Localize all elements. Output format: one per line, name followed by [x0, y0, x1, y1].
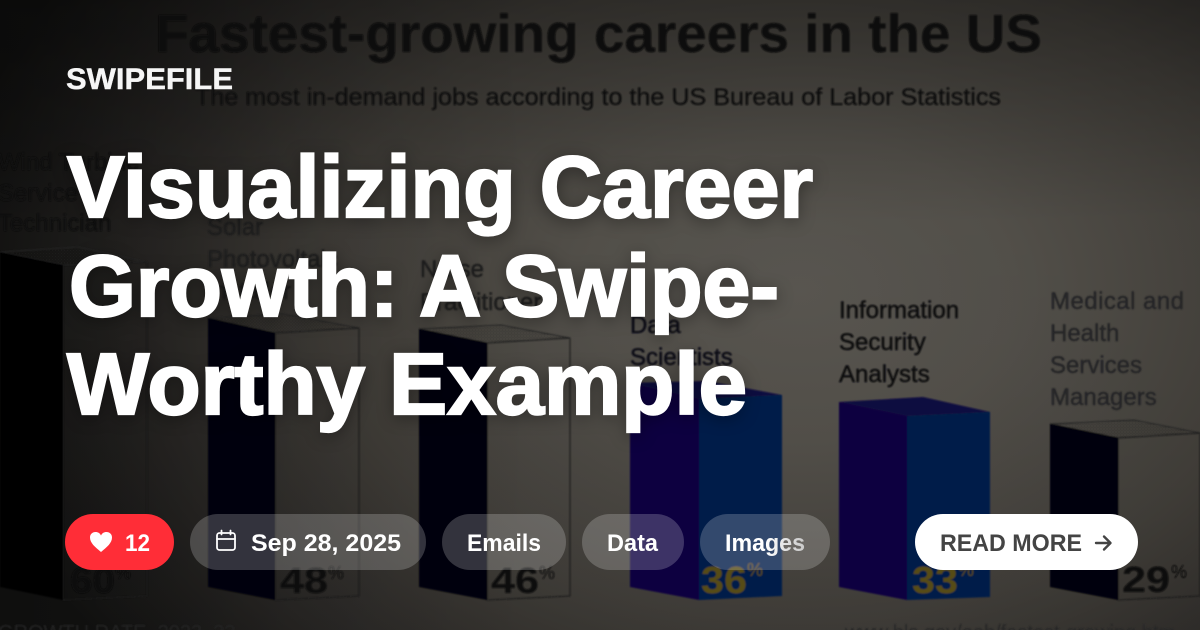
- tag: emails: Emails: [467, 530, 541, 557]
- bar: information security analysts 33%: %: [958, 560, 974, 580]
- bar: data scientists 36%: Scientists: [630, 344, 733, 371]
- bar: wind turbine service technician 60%: %: [115, 563, 131, 583]
- read more button: READ MORE: [940, 530, 1082, 557]
- title: Visualizing Career: [67, 139, 813, 236]
- bar: wind turbine service technician 60%: Service: [0, 180, 78, 207]
- bar: medical and health services managers 29%: Services: [1050, 352, 1142, 379]
- date pill: [190, 514, 426, 570]
- like count pill: [65, 514, 174, 570]
- title: Growth: A Swipe-: [69, 238, 779, 335]
- bar: wind turbine service technician 60%: Technician: [0, 210, 111, 237]
- tag: emails: [442, 514, 566, 570]
- bar: data scientists 36%: [630, 312, 782, 602]
- bar: data scientists 36%: Data: [630, 312, 681, 339]
- chart title: Fastest-growing careers in the US: [155, 4, 1042, 64]
- tag: data: Data: [607, 530, 659, 557]
- bar: information security analysts 33%: 33: [912, 560, 958, 602]
- bar: solar photovoltaic installer 48%: Solar: [207, 214, 263, 241]
- bar: medical and health services managers 29%: Health: [1050, 320, 1119, 347]
- icon: arrow: [1096, 536, 1110, 550]
- bar: medical and health services managers 29%: Managers: [1050, 384, 1157, 411]
- bar: medical and health services managers 29%: 29: [1122, 559, 1170, 600]
- tag: data: [582, 514, 684, 570]
- tag: images: Images: [725, 530, 805, 557]
- bar: data scientists 36%: %: [747, 560, 763, 580]
- bar: information security analysts 33%: Analysts: [839, 361, 930, 388]
- read more button: [915, 514, 1138, 570]
- date: Sep 28, 2025: [251, 530, 401, 557]
- bar: solar photovoltaic installer 48%: %: [328, 563, 344, 583]
- bar: nurse practitioners 46%: %: [539, 563, 555, 583]
- title: Worthy Example: [67, 336, 747, 433]
- site label: SWIPEFILE: [66, 63, 233, 96]
- bar: nurse practitioners 46%: [419, 256, 570, 601]
- bar: nurse practitioners 46%: 46: [491, 560, 539, 601]
- icon: calendar: [217, 530, 235, 550]
- bar: information security analysts 33%: Security: [839, 329, 926, 356]
- bar: wind turbine service technician 60%: Wind Turbine: [0, 149, 139, 176]
- bar: information security analysts 33%: Information: [839, 297, 959, 324]
- bar: information security analysts 33%: [839, 297, 990, 602]
- tag: images: [700, 514, 830, 570]
- bar: solar photovoltaic installer 48%: 48: [280, 560, 328, 601]
- bar: solar photovoltaic installer 48%: [207, 214, 359, 601]
- bar: wind turbine service technician 60%: 60: [70, 560, 115, 601]
- bar: solar photovoltaic installer 48%: Installer: [207, 278, 291, 305]
- bar: medical and health services managers 29%: [1050, 288, 1200, 600]
- title: [66, 139, 813, 436]
- like count: 12: [125, 530, 150, 557]
- bar: nurse practitioners 46%: Practitioners: [420, 289, 553, 316]
- chart subtitle: The most in-demand jobs according to the US Bureau of Labor Statistics: [195, 84, 1001, 111]
- bar: nurse practitioners 46%: Nurse: [420, 256, 484, 283]
- bar: wind turbine service technician 60%: [0, 149, 147, 601]
- bar: solar photovoltaic installer 48%: Photovoltaic: [207, 246, 338, 273]
- bar: data scientists 36%: 36: [701, 560, 747, 602]
- icon: heart: [90, 532, 112, 552]
- bar: medical and health services managers 29%: %: [1171, 562, 1187, 582]
- bar: medical and health services managers 29%: Medical and: [1050, 288, 1184, 315]
